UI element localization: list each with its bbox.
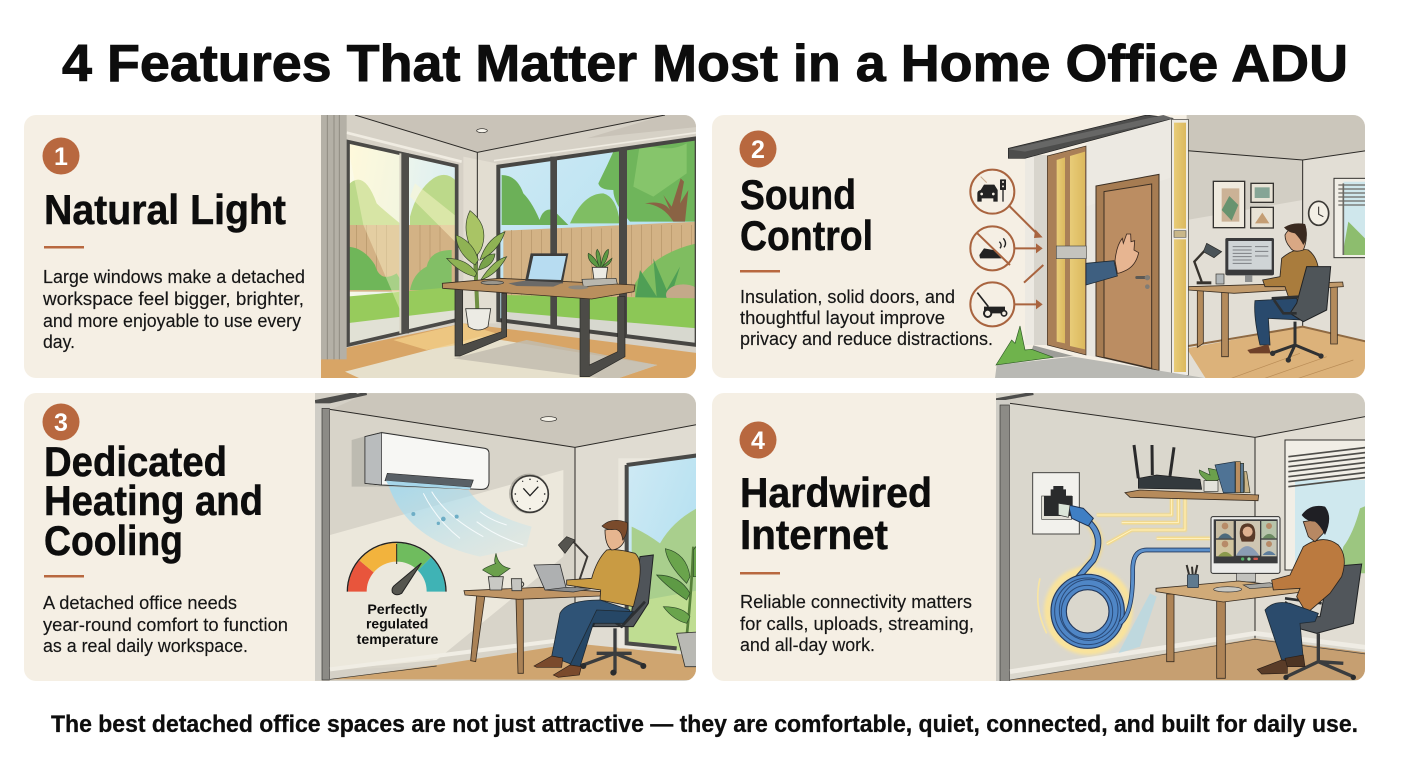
heading: hardwired internet: Internet: [740, 511, 888, 558]
body text: hardwired internet: [740, 592, 974, 655]
left window: [347, 133, 462, 347]
gauge caption: [357, 601, 439, 647]
chair and person: [1257, 506, 1362, 680]
ground and grass: [995, 326, 1207, 378]
title: 4 Features That Matter Most in a Home Office ADU: [62, 35, 1348, 93]
body text: heating and cooling: A detached office needs: [43, 593, 237, 613]
interior room: [1187, 115, 1367, 380]
shelf with router, plant and books: [1125, 445, 1259, 501]
heading: hardwired internet: [740, 469, 932, 558]
cold air flow: [388, 485, 532, 557]
panel: hardwired internet: [712, 390, 1373, 687]
number badge 3: [42, 404, 80, 440]
small plant on books: [568, 249, 617, 289]
body text: hardwired internet: Reliable connectivity matters: [740, 592, 972, 612]
body text: sound control: privacy and reduce distractions.: [740, 329, 993, 349]
heading: sound control: [740, 171, 873, 259]
wall jack: [1033, 473, 1079, 534]
chair and seated person: [534, 520, 653, 677]
number badge 3: 3: [54, 409, 68, 437]
wall clock: [1309, 201, 1329, 225]
gauge caption: temperature: [357, 631, 439, 647]
body text: natural light: Large windows make a detached: [43, 267, 305, 287]
body text: heating and cooling: as a real daily workspace.: [43, 636, 248, 656]
temperature gauge: [347, 542, 446, 647]
large potted plant: [656, 546, 696, 668]
desk with laptop: [464, 537, 602, 673]
illustration: office with mini-split and gauge: [310, 390, 703, 687]
wall clock: [509, 474, 549, 514]
monitor with video call: [1211, 517, 1280, 582]
desk: [442, 278, 635, 377]
gauge caption: Perfectly: [367, 601, 428, 617]
framed pictures: [1213, 181, 1273, 228]
number badge 1: 1: [54, 143, 68, 171]
number badge 2: [740, 130, 776, 168]
laptop: [481, 253, 568, 287]
body text: natural light: day.: [43, 332, 75, 352]
floor: [1010, 638, 1373, 680]
floor and rug: [320, 323, 700, 383]
noise source icons and arrows: [970, 170, 1043, 326]
body text: natural light: [42, 267, 305, 352]
number badge 1: [42, 138, 80, 174]
body text: heating and cooling: [43, 593, 288, 656]
number badge 4: 4: [751, 427, 765, 455]
illustration: sunlit office with large windows: [320, 110, 701, 383]
desk with monitor and lamp: [1188, 238, 1343, 357]
heading: natural light: Natural Light: [44, 186, 286, 233]
ethernet cable coil: [1048, 503, 1210, 651]
number badge 4: [740, 422, 776, 458]
body text: hardwired internet: for calls, uploads, streaming,: [740, 614, 974, 634]
body text: sound control: [740, 287, 993, 349]
body text: sound control: Insulation, solid doors, and: [740, 287, 955, 307]
heading: sound control: Sound: [740, 171, 856, 218]
gauge caption: regulated: [366, 616, 428, 632]
body text: hardwired internet: and all-day work.: [740, 635, 875, 655]
heading: heating and cooling: Dedicated: [44, 438, 227, 485]
heading: sound control: Control: [740, 212, 873, 259]
closing statement: The best detached office spaces are not just attractive — they are comfortable, quiet, connected, and built for daily use.: [51, 711, 1358, 738]
roof overhang: [1008, 115, 1173, 158]
glowing signal lines: [1038, 495, 1210, 653]
panel: dedicated heating and cooling: [24, 390, 703, 687]
panel: natural light: [24, 110, 701, 383]
potted plant: [447, 211, 507, 330]
floor: [330, 643, 703, 680]
person at desk: [1247, 223, 1331, 363]
heading: hardwired internet: Hardwired: [740, 469, 932, 516]
heading: heating and cooling: Cooling: [44, 517, 183, 564]
desk: [1156, 565, 1307, 678]
air conditioner: [352, 432, 489, 490]
right window: [494, 133, 701, 350]
heading: heating and cooling: [44, 438, 263, 564]
window with blinds: [1285, 440, 1373, 573]
number badge 2: 2: [751, 136, 765, 164]
hand on door: [1086, 234, 1139, 285]
body text: heating and cooling: year-round comfort to function: [43, 615, 288, 635]
heading: heating and cooling: Heating and: [44, 477, 263, 524]
body text: natural light: and more enjoyable to use every: [43, 311, 301, 331]
window: [618, 454, 696, 651]
curtain: [320, 110, 347, 359]
exterior wall with door: [1025, 118, 1188, 375]
panel: sound control: [712, 115, 1367, 380]
window with blinds: [1334, 178, 1367, 258]
illustration: insulated wall and quiet office: [970, 115, 1367, 380]
body text: sound control: thoughtful layout improve: [740, 308, 945, 328]
body text: natural light: workspace feel bigger, brighter,: [42, 289, 304, 309]
illustration: wired connection to video call: [990, 390, 1373, 687]
